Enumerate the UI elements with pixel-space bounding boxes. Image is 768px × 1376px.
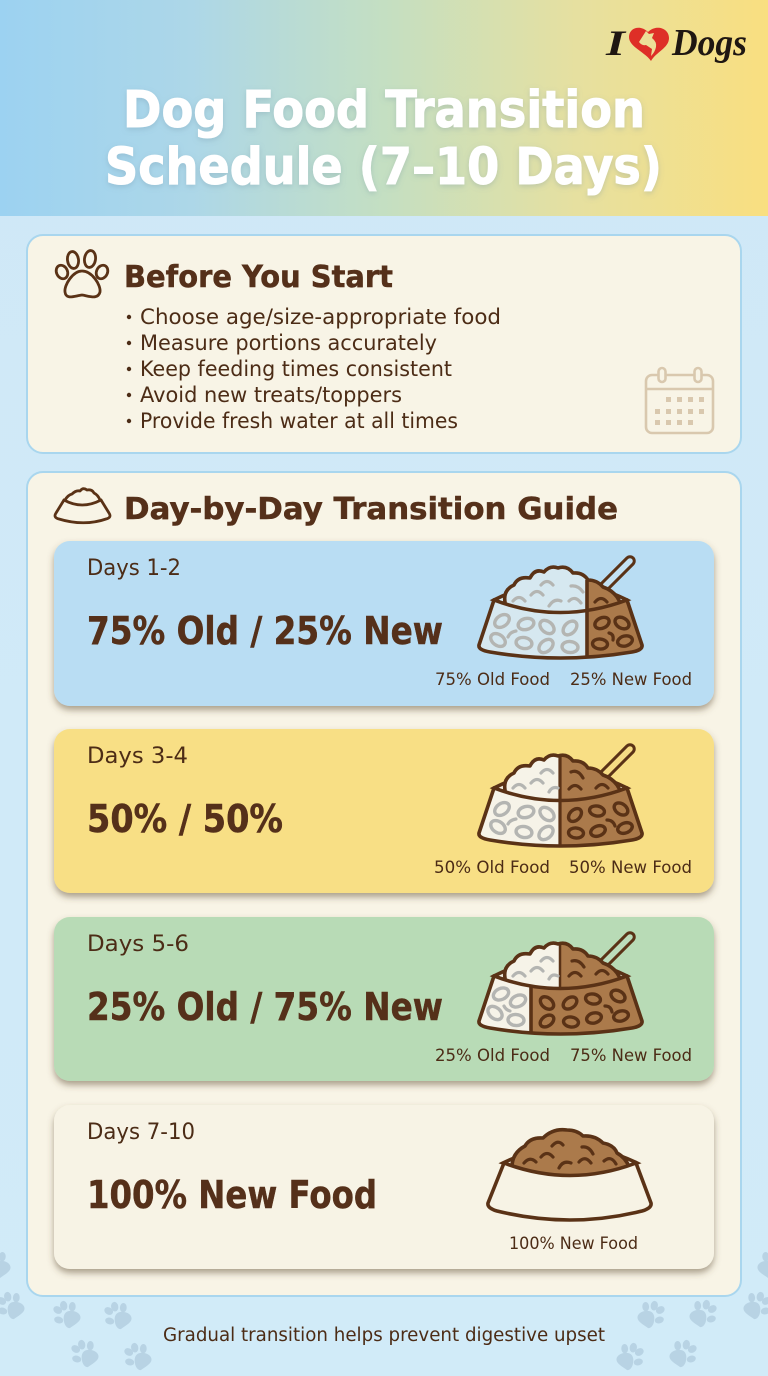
card: days 1-2: 75% Old Food — [435, 670, 550, 690]
icon: bowl 75/25 — [479, 561, 642, 658]
header banner — [0, 0, 768, 216]
icon: bowl 100 percent new — [488, 1130, 651, 1220]
title — [105, 81, 662, 197]
panel: day-by-day guide — [27, 472, 741, 1296]
card: days 7-10: 100% New Food — [509, 1234, 638, 1254]
card: days 3-4 — [54, 729, 714, 893]
card: days 1-2: 25% New Food — [570, 670, 692, 690]
card: days 3-4: 50% / 50% — [87, 797, 283, 841]
background paw prints — [0, 1250, 768, 1370]
icon: bowl 50/50 — [479, 749, 642, 846]
card: days 5-6: 75% New Food — [570, 1046, 692, 1066]
checklist: Choose age/size-appropriate food — [140, 305, 501, 330]
card: days 1-2: 75% Old / 25% New — [87, 609, 443, 653]
card: days 7-10: 100% New Food — [87, 1173, 377, 1217]
card: days 5-6: 25% Old Food — [435, 1046, 550, 1066]
title: Dog Food Transition — [123, 81, 645, 140]
title: Schedule (7–10 Days) — [105, 138, 662, 197]
checklist: Measure portions accurately — [140, 331, 437, 356]
logo: I love Dogs — [605, 22, 747, 64]
card: days 5-6 — [54, 917, 714, 1081]
card: days 3-4: 50% New Food — [569, 858, 692, 878]
panel: before you start — [27, 235, 741, 453]
footer note: Gradual transition helps prevent digestive upset — [163, 1325, 605, 1346]
card: days 7-10: Days 7-10 — [87, 1120, 195, 1145]
card: days 1-2: Days 1-2 — [87, 556, 181, 581]
icon: calendar — [646, 368, 713, 433]
heading: day-by-day: Day-by-Day Transition Guide — [124, 492, 618, 527]
card: days 3-4: 50% Old Food — [434, 858, 550, 878]
checklist — [127, 305, 501, 434]
logo: I love Dogs: Dogs — [671, 22, 747, 64]
card: days 5-6: 25% Old / 75% New — [87, 985, 443, 1029]
icon: small bowl — [55, 489, 110, 523]
card: days 3-4: Days 3-4 — [87, 744, 188, 769]
icon: paw — [54, 250, 110, 297]
heading: before you start: Before You Start — [124, 260, 393, 295]
checklist: Avoid new treats/toppers — [140, 383, 402, 408]
checklist: Keep feeding times consistent — [140, 357, 452, 382]
logo: I love Dogs: I — [605, 23, 628, 63]
icon: bowl 25/75 — [479, 937, 642, 1034]
card: days 1-2 — [54, 541, 714, 706]
card: days 5-6: Days 5-6 — [87, 932, 189, 957]
card: days 7-10 — [54, 1105, 714, 1269]
checklist: Provide fresh water at all times — [140, 409, 458, 434]
